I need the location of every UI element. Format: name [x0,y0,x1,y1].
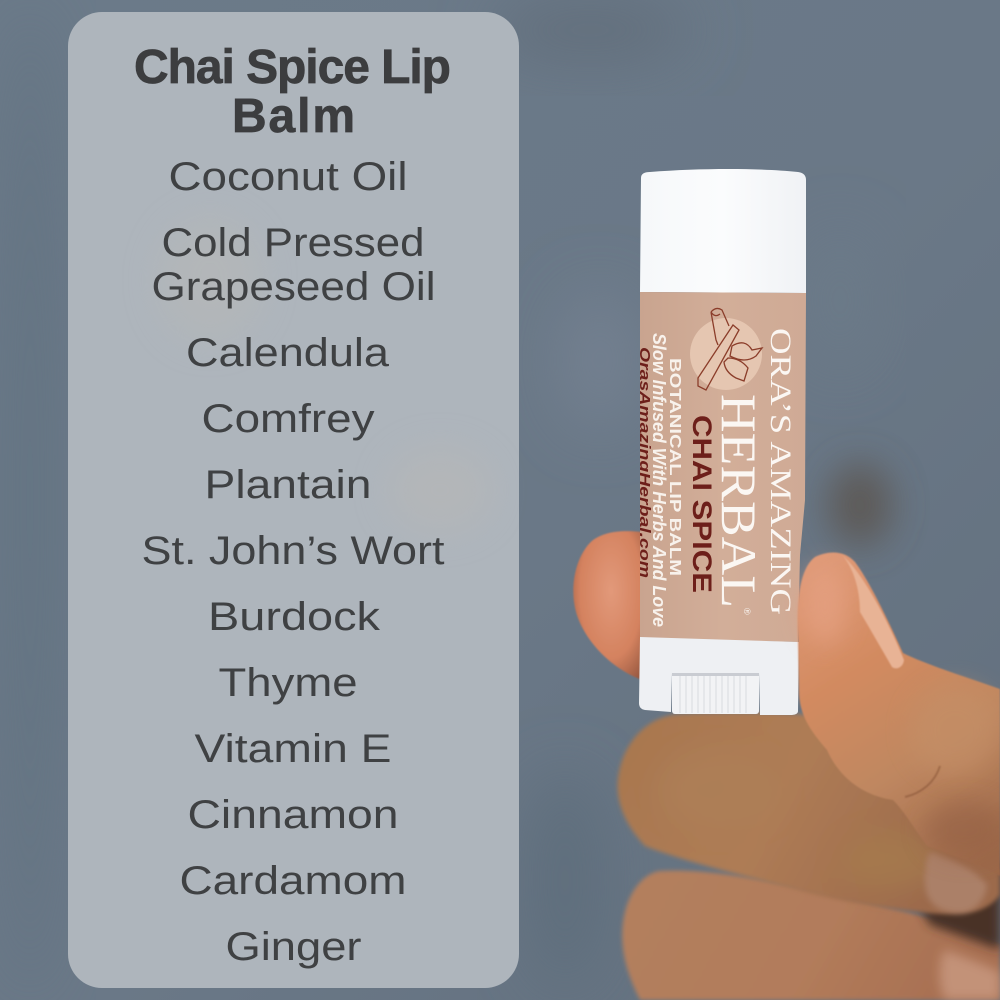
ingredient list: Burdock [208,595,381,639]
label text: ORA’S AMAZING [764,328,797,615]
label text: OrasAmazingHerbal.com [636,347,653,578]
ingredient list: Cardamom [180,859,406,903]
hand: thumb [798,553,1000,876]
label text: Slow Infused With Herbs And Love [649,333,669,627]
label spice illustration [690,308,762,390]
hand: ring finger [622,871,1000,1000]
label text: ® [742,608,752,615]
ingredient list: Comfrey [202,397,374,441]
title: Balm [232,90,355,143]
ingredient list: St. John’s Wort [142,529,444,573]
tube base [639,637,799,715]
ingredient list [142,155,444,969]
ingredient list: Thyme [218,661,358,705]
ingredient list: Vitamin E [194,727,392,771]
label text: BOTANICAL LIP BALM [666,358,683,576]
ingredient list: Plantain [204,463,372,507]
ingredient list: Ginger [226,925,362,969]
title [134,41,451,143]
twist knob [672,673,759,714]
tube cap [640,169,806,293]
thumb knuckle crease [905,766,940,797]
ingredient list: Coconut Oil [168,155,408,199]
ingredient list: Cinnamon [188,793,398,837]
ingredient list: Calendula [186,331,390,375]
tube label [636,292,806,642]
label text: HERBAL [711,394,767,608]
label text [636,328,797,627]
panel: ingredients [68,12,519,988]
hand: middle finger [617,713,1000,914]
lip balm tube [636,169,806,715]
title: Chai Spice Lip [134,41,451,94]
ingredient list: Cold Pressed [162,221,424,265]
thumb nail [843,556,904,668]
ingredient list: Grapeseed Oil [152,265,436,309]
hand: shadow between fingers [905,860,1000,950]
hand: left fingertip [573,531,642,680]
label text: CHAI SPICE [687,415,717,593]
